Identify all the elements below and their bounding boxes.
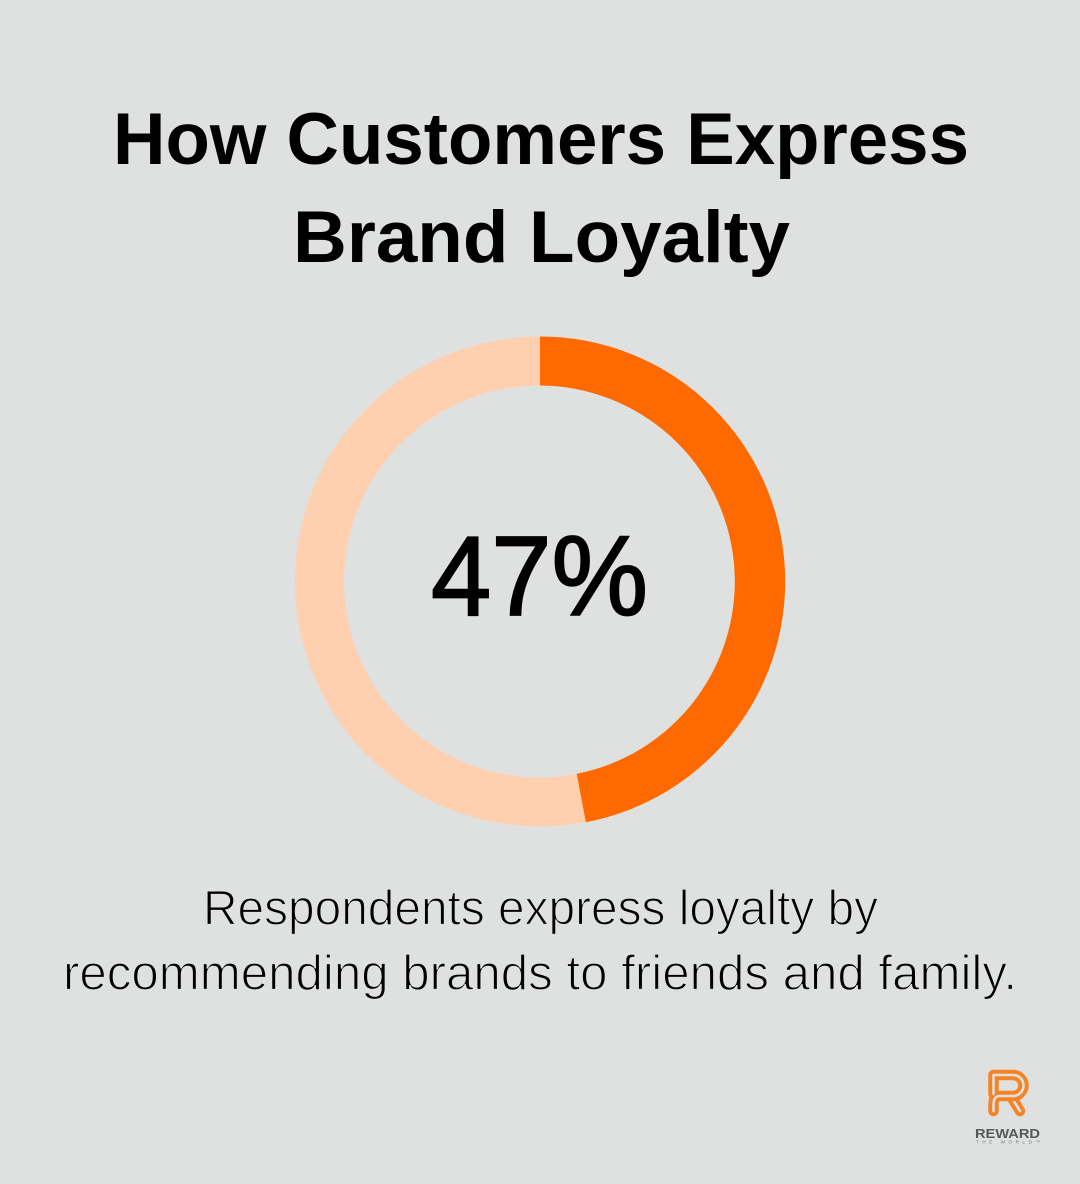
description (63, 882, 1017, 1000)
title (113, 99, 969, 278)
description: Respondents express loyalty by (203, 882, 878, 936)
icon: R mark (994, 1075, 1024, 1111)
center value: 47% (431, 513, 648, 639)
logo: Reward the World (975, 1075, 1040, 1144)
title: Brand Loyalty (293, 197, 790, 278)
donut chart: 47% (320, 336, 785, 822)
logo wordmark: REWARD (975, 1126, 1040, 1141)
title: How Customers Express (113, 99, 969, 180)
description: recommending brands to friends and family. (63, 946, 1017, 1000)
logo tagline: THE WORLD™ (976, 1140, 1040, 1144)
